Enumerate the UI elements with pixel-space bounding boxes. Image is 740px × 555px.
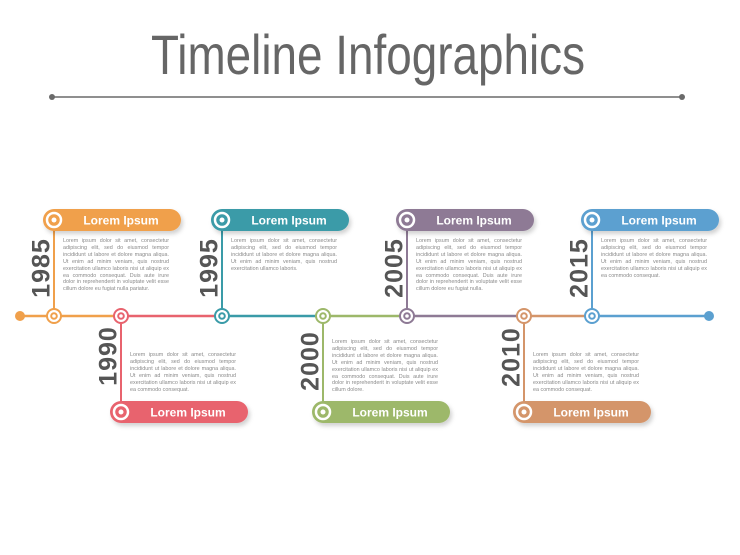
text 2005: Lorem ipsum dolor sit amet, consectetur adipiscing elit, sed do eiusmod tempor incididunt ut labore et dolore magna aliqua. Ut enim ad minim veniam, quis nostrud exercitation ullamco laboris nisi ut aliquip ex ea commodo consequat. Duis aute irure dolor in reprehenderit in voluptate velit esse cillum dolore eu fugiat nulla.: [416, 238, 522, 292]
text 1995: Lorem ipsum dolor sit amet, consectetur adipiscing elit, sed do eiusmod tempor incididunt ut labore et dolore magna aliqua. Ut enim ad minim veniam, quis nostrud exercitation ullamco laboris.: [231, 238, 337, 272]
text 1990: Lorem ipsum dolor sit amet, consectetur adipiscing elit, sed do eiusmod tempor incididunt ut labore et dolore magna aliqua. Ut enim ad minim veniam, quis nostrud exercitation ullamco laboris nisi ut aliquip ex ea commodo consequat.: [130, 352, 236, 393]
text 2010: Lorem ipsum dolor sit amet, consectetur adipiscing elit, sed do eiusmod tempor incididunt ut labore et dolore magna aliqua. Ut enim ad minim veniam, quis nostrud exercitation ullamco laboris nisi ut aliquip ex ea commodo consequat.: [533, 352, 639, 393]
pills: Lorem Ipsum: [150, 406, 226, 420]
year 2000: 2000: [296, 331, 324, 391]
pills: Lorem Ipsum: [621, 214, 697, 228]
nodes: [47, 309, 599, 323]
year 2015: 2015: [566, 238, 594, 298]
year 1985: 1985: [28, 238, 56, 298]
pills: Lorem Ipsum: [553, 406, 629, 420]
connectors: [54, 220, 592, 412]
year 1990: 1990: [94, 326, 122, 386]
title underline: [49, 94, 685, 100]
main line: [15, 311, 714, 321]
pills: Lorem Ipsum: [83, 214, 159, 228]
text 1985: Lorem ipsum dolor sit amet, consectetur adipiscing elit, sed do eiusmod tempor incididunt ut labore et dolore magna aliqua. Ut enim ad minim veniam, quis nostrud exercitation ullamco laboris nisi ut aliquip ex ea commodo consequat. Duis aute irure dolor in reprehenderit in voluptate velit esse cillum dolore eu fugiat nulla pariatur.: [63, 238, 169, 292]
pills: [43, 209, 719, 423]
text 2015: Lorem ipsum dolor sit amet, consectetur adipiscing elit, sed do eiusmod tempor incididunt ut labore et dolore magna aliqua. Ut enim ad minim veniam, quis nostrud exercitation ullamco laboris nisi ut aliquip ex ea commodo consequat.: [601, 238, 707, 279]
text 2000: Lorem ipsum dolor sit amet, consectetur adipiscing elit, sed do eiusmod tempor incididunt ut labore et dolore magna aliqua. Ut enim ad minim veniam, quis nostrud exercitation ullamco laboris nisi ut aliquip ex ea commodo consequat. Duis aute irure dolor in reprehenderit in voluptate velit esse cillum dolore.: [332, 339, 438, 393]
pills: Lorem Ipsum: [436, 214, 512, 228]
pills: Lorem Ipsum: [352, 406, 428, 420]
year 2010: 2010: [498, 327, 526, 387]
title: Timeline Infographics: [151, 23, 585, 86]
year 2005: 2005: [380, 238, 408, 298]
pills: Lorem Ipsum: [251, 214, 327, 228]
year 1995: 1995: [196, 238, 224, 298]
